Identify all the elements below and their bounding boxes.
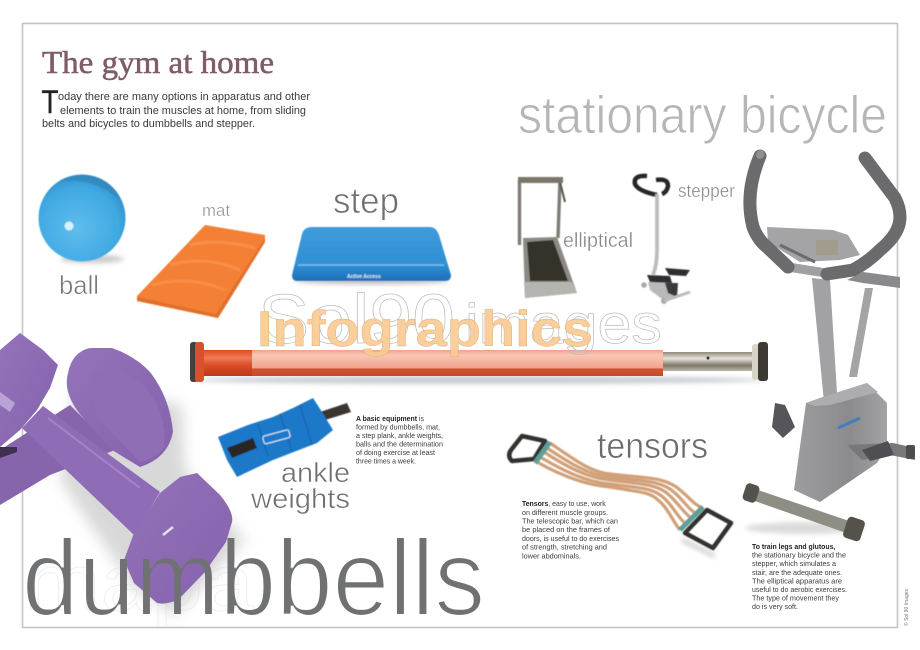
- back dumbbell handle: [0, 405, 115, 505]
- text: legs and glutous: useful to do aerobic exercises.: [752, 587, 847, 594]
- label: step: step: [333, 180, 399, 221]
- front dumbbell lower head: [124, 473, 232, 604]
- text: basic equipment: a step plank, ankle weights,: [356, 433, 443, 440]
- text: legs and glutous: stair, are the adequate ones.: [752, 570, 842, 577]
- text: tensors: Tensors, easy to use, work: [522, 501, 606, 508]
- text: tensors: on different muscle groups.: [522, 510, 608, 517]
- text: legs and glutous: do is very soft.: [752, 604, 798, 611]
- telescopic bar: [190, 342, 768, 384]
- text: basic equipment: formed by dumbbells, mat,: [356, 424, 440, 432]
- text: basic equipment: balls and the determination: [356, 442, 443, 448]
- icon: step platform: [292, 227, 451, 284]
- label: tensors: tensors: [597, 425, 708, 466]
- intro text: elements to train the muscles at home, from sliding: [60, 105, 306, 117]
- back dumbbell head: [67, 348, 173, 467]
- text: basic equipment: [356, 416, 443, 466]
- text: legs and glutous: stepper, which simulates a: [752, 561, 836, 568]
- handlebar end caps: [756, 154, 764, 155]
- label: ankle weights: [250, 457, 350, 514]
- text: legs and glutous: The type of movement they: [752, 596, 840, 603]
- text: legs and glutous: The elliptical apparatus are: [752, 578, 842, 585]
- label: ankle weights: weights: [250, 483, 350, 514]
- icon: treadmill: [518, 177, 577, 298]
- text: basic equipment: A basic equipment is: [356, 416, 424, 423]
- label: elliptical: elliptical: [563, 230, 633, 252]
- bike console: [767, 227, 860, 262]
- text: tensors: of strength, stretching and: [522, 545, 607, 552]
- icon: ball: [38, 174, 126, 263]
- title: The gym at home: [42, 44, 274, 80]
- text: legs and glutous: To train legs and glutous,: [752, 544, 835, 551]
- tensor springs: [537, 443, 703, 530]
- bike console grip: [772, 403, 795, 438]
- icon: mat: [137, 225, 265, 318]
- intro text: belts and bicycles to dumbbells and stepper.: [42, 118, 255, 130]
- copyright: © Sol 90 Images: [903, 588, 910, 626]
- text: tensors: doors, is useful to do exercises: [522, 536, 620, 543]
- bar: right cap: [752, 344, 759, 380]
- dark gap: [0, 447, 17, 458]
- text: tensors: be placed on the frames of: [522, 527, 610, 534]
- bike base: [746, 488, 858, 535]
- heading: dumbbells: dumbbells: [22, 517, 485, 638]
- label: mat: mat: [202, 201, 230, 220]
- icon: ankle weight: [218, 398, 351, 477]
- text: tensors: lower abdominals.: [522, 553, 581, 560]
- front dumbbell upper head: [0, 333, 58, 447]
- bike front post: [812, 278, 837, 402]
- text: tensors: The telescopic bar, which can: [522, 518, 618, 526]
- text: tensors: [522, 501, 620, 560]
- heading: stationary bicycle: stationary bicycle: [518, 86, 887, 145]
- text: legs and glutous: [752, 544, 847, 611]
- bar: steel section: [662, 352, 754, 371]
- bike pedal: [847, 443, 915, 460]
- watermark: images: images: [465, 292, 662, 355]
- bike flywheel housing: [794, 383, 887, 502]
- bar: red section: [203, 350, 663, 376]
- drop cap: T: [42, 84, 58, 120]
- label: ball: ball: [59, 270, 99, 300]
- label: stepper: stepper: [678, 181, 735, 201]
- icon: stationary bicycle: [742, 154, 915, 542]
- text: basic equipment: of doing exercise at least: [356, 450, 435, 457]
- text: legs and glutous: the stationary bicycle and the: [752, 553, 846, 560]
- text: basic equipment: three times a week.: [356, 458, 416, 466]
- shadow: [60, 385, 245, 615]
- watermark: faint mat outline: mapa: [24, 538, 255, 627]
- label: ankle weights: ankle: [281, 457, 350, 488]
- bike rear post: [849, 288, 873, 377]
- watermark: Sol90: Sol90: [258, 280, 455, 358]
- bar: left cap: [190, 342, 198, 382]
- icon: tensors: [509, 436, 731, 556]
- watermark: Infographics: Infographics: [257, 301, 593, 357]
- bike handlebar: [750, 154, 900, 274]
- intro text: oday there are many options in apparatus and other: [58, 91, 310, 103]
- tensor handle right: [685, 510, 731, 548]
- dumbbells photo: [0, 333, 245, 615]
- step brand text: Active Access: [347, 274, 381, 280]
- intro text: [42, 84, 310, 130]
- tensor handle left: [509, 436, 545, 461]
- bike seat: [847, 272, 900, 288]
- front dumbbell handle: [22, 406, 160, 535]
- icon: stepper: [635, 176, 690, 304]
